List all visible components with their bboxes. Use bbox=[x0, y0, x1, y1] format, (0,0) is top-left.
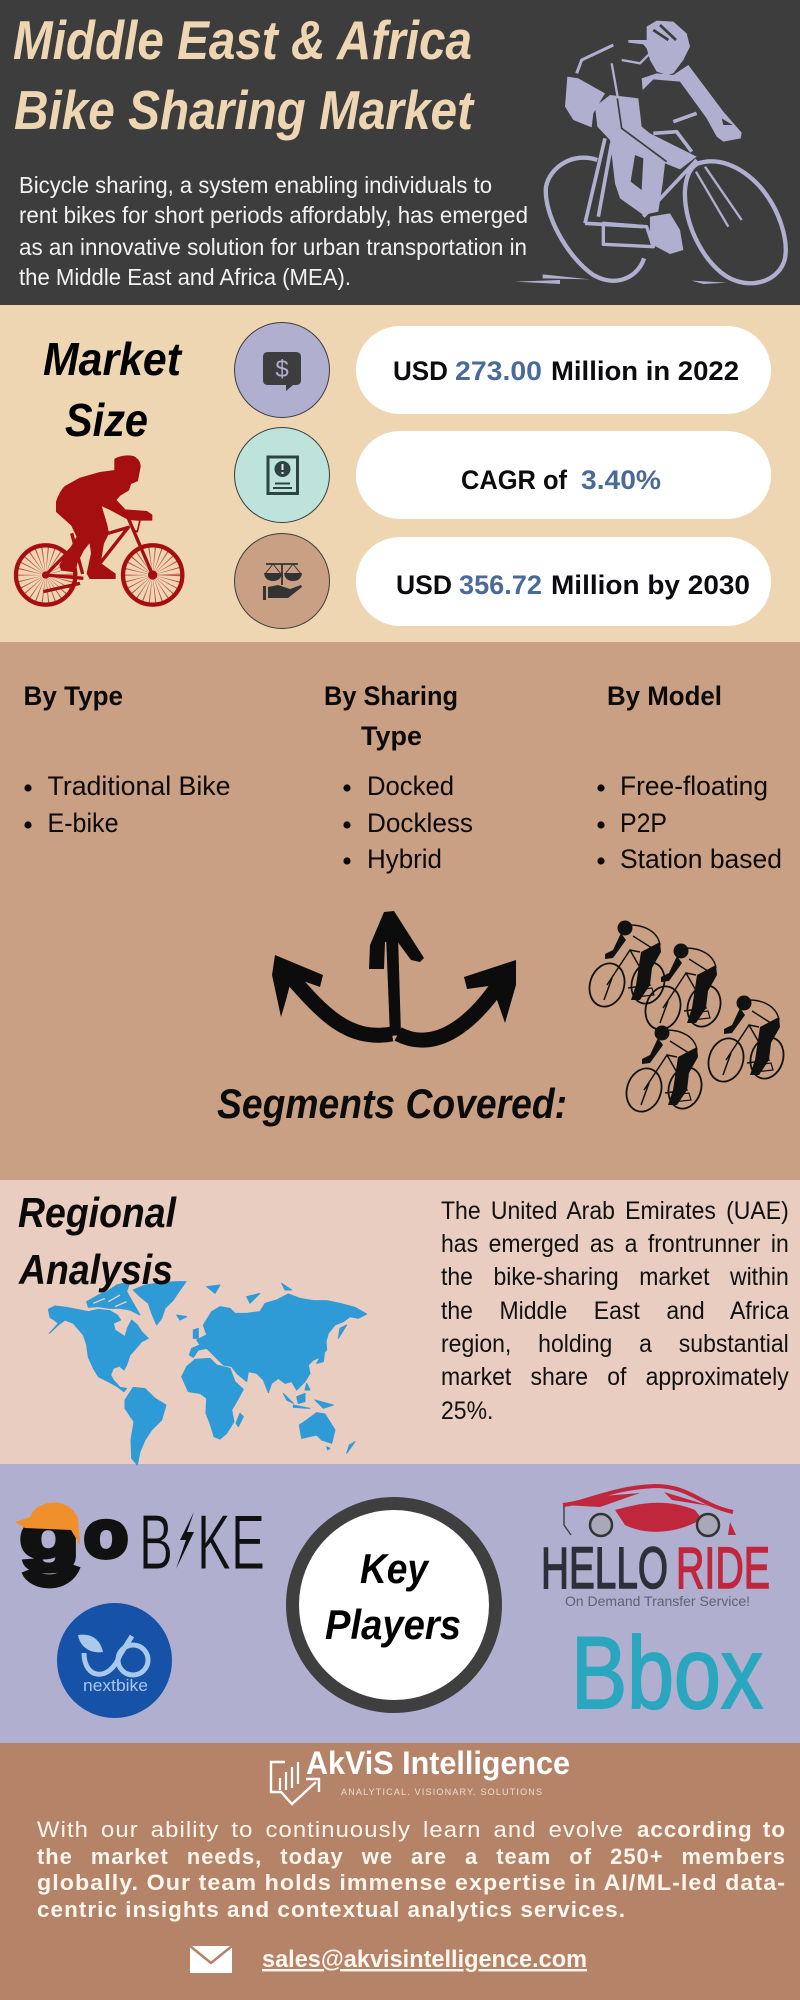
footer text block bbox=[37, 1817, 786, 1922]
panel: footer background bbox=[0, 1743, 800, 2000]
footer text block: centric insights and contextual analytics services. bbox=[37, 1897, 626, 1922]
stat pill: CAGR: CAGR of bbox=[461, 465, 568, 495]
regional analysis paragraph: market share of approximately bbox=[441, 1363, 789, 1391]
market size icon: balance and hand bbox=[234, 534, 330, 628]
stat pill: CAGR bbox=[356, 431, 771, 519]
stat pill: 2030 market size bbox=[356, 537, 771, 626]
logo: HelloRide bbox=[541, 1486, 770, 1609]
regional analysis paragraph: the Middle East and Africa bbox=[441, 1297, 789, 1325]
panel: segments background bbox=[0, 642, 800, 1180]
segment column: by model bbox=[597, 681, 782, 874]
stat pill: CAGR: 3.40% bbox=[581, 465, 661, 495]
segment column: by sharing type: Hybrid bbox=[367, 844, 442, 874]
icon: cyclist illustration bbox=[515, 21, 786, 284]
regional analysis paragraph: region, holding a substantial bbox=[441, 1330, 789, 1358]
logo: goBIKE: o bbox=[84, 1497, 128, 1571]
logo: Bbox: Bbox bbox=[571, 1616, 763, 1730]
stat pill: 2030 market size: USD bbox=[396, 570, 452, 600]
segment column: by model: Free-floating bbox=[620, 771, 768, 801]
logo: nextbike bbox=[57, 1603, 172, 1718]
market size icon: dollar speech bubble bbox=[234, 322, 330, 418]
icon: envelope bbox=[190, 1946, 232, 1973]
title: Bike Sharing Market bbox=[14, 79, 475, 141]
regional analysis paragraph: has emerged as a frontrunner in bbox=[441, 1230, 789, 1258]
heading: market size bbox=[43, 333, 183, 446]
arrows: three branching arrows bbox=[272, 911, 516, 1040]
segment column: by model: Station based bbox=[620, 844, 782, 874]
title bbox=[13, 9, 475, 141]
key players circle: Players bbox=[325, 1601, 461, 1648]
logo: AkViS Intelligence: AkViS Intelligence bbox=[306, 1745, 570, 1781]
key players circle bbox=[292, 1504, 496, 1706]
logo: HelloRide: On Demand Transfer Service! bbox=[565, 1593, 750, 1609]
panel: market size background bbox=[0, 305, 800, 642]
logo: goBIKE: g bbox=[20, 1497, 79, 1571]
segment column: by sharing type: Dockless bbox=[367, 808, 473, 838]
segment column: by model: P2P bbox=[620, 808, 667, 838]
logo: goBIKE bbox=[15, 1497, 265, 1586]
intro text block: the Middle East and Africa (MEA). bbox=[19, 264, 351, 290]
footer text block: With our ability to continuously learn and evolve bbox=[37, 1817, 624, 1842]
intro text block: Bicycle sharing, a system enabling individuals to bbox=[19, 172, 492, 198]
footer text block: globally. Our team holds immense expertise in AI/ML-led data- bbox=[37, 1870, 786, 1895]
heading: regional analysis: Analysis bbox=[18, 1246, 173, 1293]
segment column: by sharing type: Type bbox=[361, 721, 422, 751]
illustration: group of racing cyclists bbox=[584, 920, 789, 1116]
intro text block: rent bikes for short periods affordably, has emerged bbox=[19, 202, 528, 228]
panel: header background bbox=[0, 0, 800, 305]
title: Middle East & Africa bbox=[13, 9, 472, 71]
key players circle: Key bbox=[360, 1545, 430, 1592]
logo: goBIKE: B bbox=[139, 1498, 173, 1586]
stat pill: 2022 market size: Million in 2022 bbox=[551, 356, 739, 386]
footer text block: according to bbox=[637, 1817, 786, 1842]
segment column: by model: By Model bbox=[607, 681, 722, 711]
footer text block: the market needs, today we are a team of 250+ members bbox=[37, 1844, 786, 1869]
segment column: by sharing type bbox=[324, 681, 473, 874]
heading: market size: Size bbox=[65, 394, 148, 446]
segment column: by type bbox=[24, 681, 230, 838]
regional analysis paragraph bbox=[441, 1197, 789, 1425]
stat pill: 2022 market size: USD bbox=[393, 356, 448, 386]
logo: nextbike: nextbike bbox=[83, 1676, 148, 1695]
stat pill: 2030 market size: 356.72 bbox=[459, 570, 542, 600]
regional analysis paragraph: The United Arab Emirates (UAE) bbox=[441, 1197, 789, 1225]
segment column: by sharing type: By Sharing bbox=[324, 681, 458, 711]
segment column: by sharing type: Docked bbox=[367, 771, 454, 801]
panel: key players background bbox=[0, 1464, 800, 1743]
segment column: by type: E-bike bbox=[48, 808, 118, 838]
stat pill: 2022 market size bbox=[356, 326, 771, 414]
intro text block: as an innovative solution for urban transportation in bbox=[19, 234, 527, 260]
logo: AkViS Intelligence: ANALYTICAL. VISIONARY. SOLUTIONS bbox=[341, 1787, 542, 1797]
market size icon: report bbox=[234, 428, 330, 522]
logo: AkViS Intelligence bbox=[271, 1745, 570, 1804]
world map bbox=[48, 1282, 367, 1465]
intro text block bbox=[19, 172, 528, 290]
stat pill: 2030 market size: Million by 2030 bbox=[551, 570, 750, 600]
regional analysis paragraph: the bike-sharing market within bbox=[441, 1263, 789, 1291]
heading: market size: Market bbox=[43, 333, 183, 385]
regional analysis paragraph: 25%. bbox=[441, 1397, 493, 1425]
panel: regional analysis background bbox=[0, 1180, 800, 1464]
segment column: by type: By Type bbox=[24, 681, 123, 711]
contact email: sales@akvisintelligence.com bbox=[262, 1946, 587, 1973]
stat pill: 2022 market size: 273.00 bbox=[455, 356, 542, 386]
heading: regional analysis bbox=[18, 1189, 177, 1293]
logo: goBIKE: KE bbox=[197, 1498, 265, 1586]
market size icon: dollar speech bubble: $ bbox=[275, 356, 289, 383]
logo: HelloRide: HELLO bbox=[541, 1536, 668, 1601]
heading: segments covered: Segments Covered: bbox=[217, 1080, 567, 1127]
icon: red cyclist bbox=[16, 456, 182, 605]
segment column: by type: Traditional Bike bbox=[48, 771, 230, 801]
heading: regional analysis: Regional bbox=[18, 1189, 177, 1236]
